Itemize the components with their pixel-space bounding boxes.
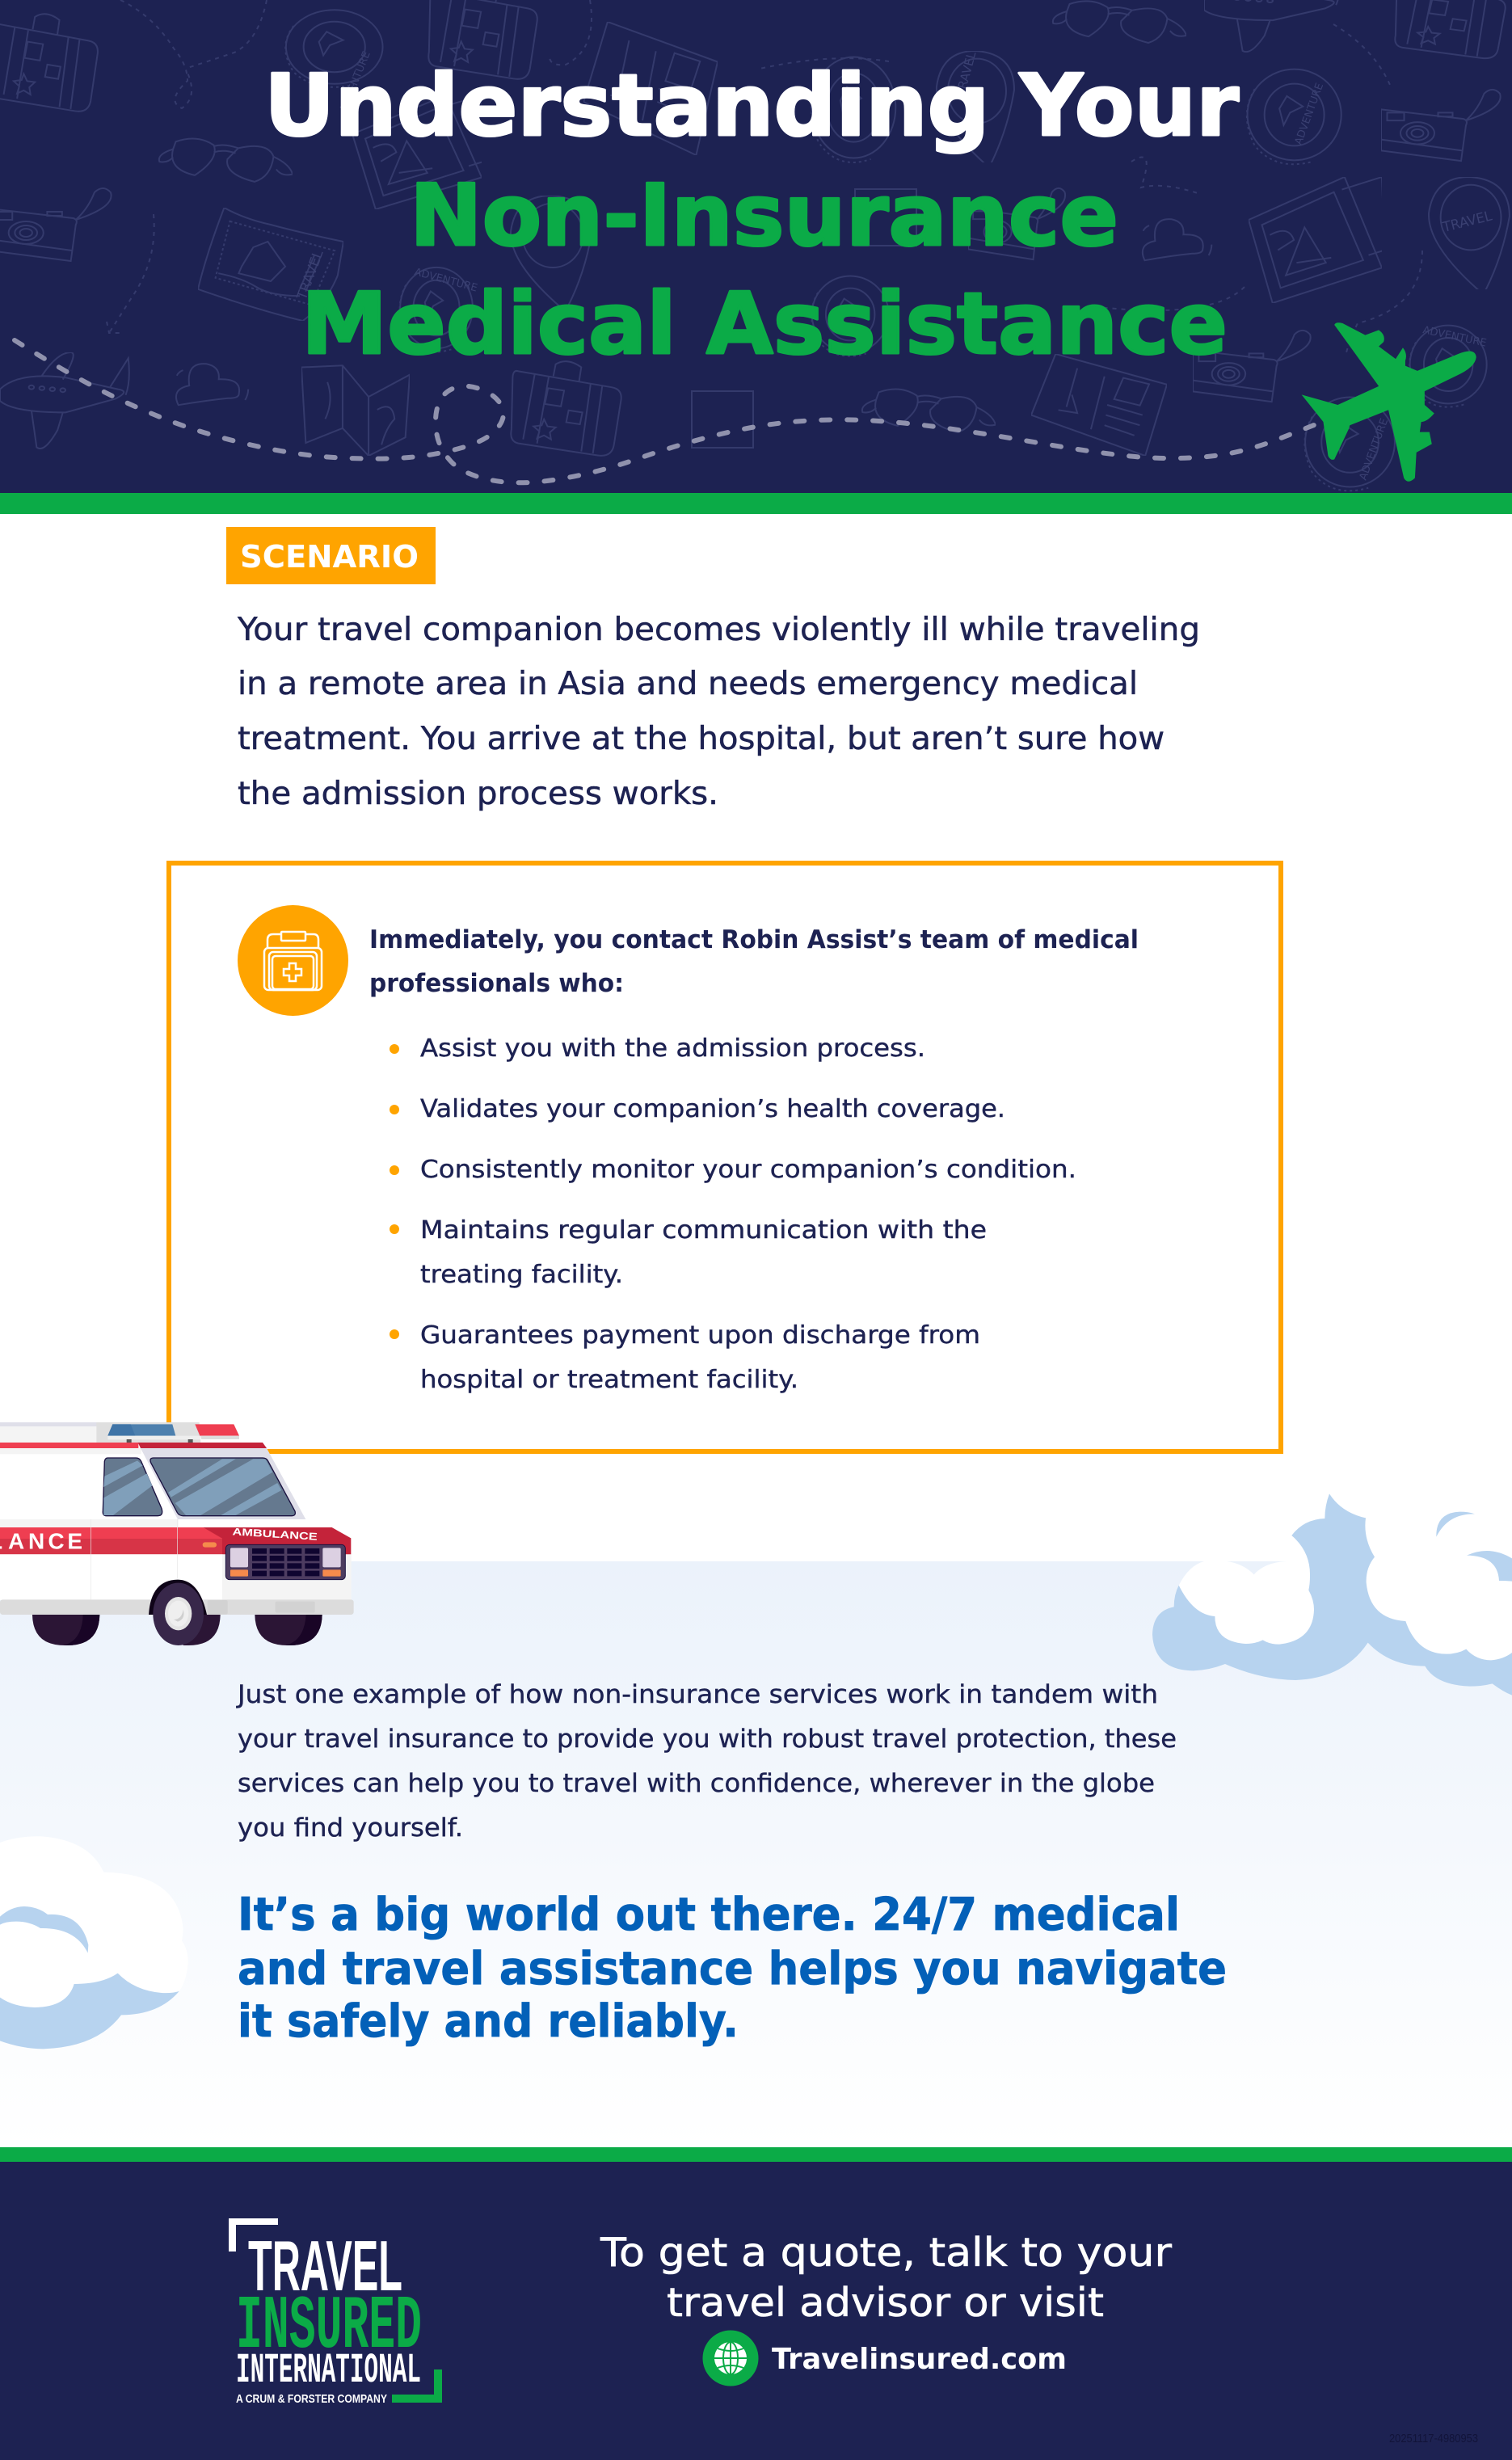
icon: green airplane — [1302, 322, 1476, 482]
closing paragraph: Just one example of how non-insurance services work in tandem with — [236, 1680, 1158, 1709]
logo: Travel Insured International: TRAVEL — [248, 2226, 402, 2306]
logo: Travel Insured International: INTERNATIONAL — [236, 2347, 421, 2395]
doodle travel pattern: ADVENTURE — [1421, 324, 1488, 350]
title: Understanding Your — [264, 57, 1239, 155]
scenario paragraph: treatment. You arrive at the hospital, but aren’t sure how — [238, 721, 1165, 757]
call to action: To get a quote, talk to your — [600, 2230, 1173, 2276]
blue call-out heading: and travel assistance helps you navigate — [238, 1943, 1227, 1995]
bullet list: hospital or treatment facility. — [420, 1366, 798, 1394]
intro sentence: Immediately, you contact Robin Assist’s team of medical — [369, 925, 1139, 954]
panel: sky background — [0, 1561, 1512, 2147]
doodle travel pattern: TRAVEL — [953, 49, 979, 99]
blue call-out heading — [238, 1889, 1227, 2048]
document code: 20251117-4980953 — [1389, 2433, 1478, 2445]
closing paragraph: you find yourself. — [238, 1813, 463, 1843]
scenario paragraph: in a remote area in Asia and needs emergency medical — [238, 666, 1138, 702]
icon: globe — [703, 2331, 758, 2386]
closing paragraph: your travel insurance to provide you with robust travel protection, these — [238, 1725, 1177, 1754]
doodle travel pattern: ADVENTURE — [413, 266, 478, 295]
panel: medical assistance box — [169, 863, 1281, 1451]
title: Medical Assistance — [301, 275, 1228, 373]
logo: Travel Insured International: A CRUM & FORSTER COMPANY — [236, 2393, 387, 2406]
ambulance hood lettering: AMBULANCE — [232, 1526, 318, 1543]
bullet list: Maintains regular communication with the — [420, 1216, 987, 1245]
bullet list: Guarantees payment upon discharge from — [420, 1321, 980, 1350]
blue call-out heading: It’s a big world out there. 24/7 medical — [238, 1889, 1180, 1941]
icon: first aid kit — [238, 905, 348, 1016]
scenario paragraph: the admission process works. — [238, 776, 718, 812]
header panel — [0, 0, 1512, 494]
bullet list: Validates your companion’s health coverage. — [420, 1095, 1005, 1123]
title: Non-Insurance — [410, 166, 1118, 265]
closing paragraph: services can help you to travel with confidence, wherever in the globe — [238, 1769, 1155, 1798]
intro sentence — [369, 925, 1139, 998]
call to action: travel advisor or visit — [667, 2280, 1104, 2326]
doodle travel pattern: ADVENTURE — [1358, 417, 1391, 482]
doodle travel pattern: ADVENTURE — [1293, 82, 1326, 146]
icon: right cloud — [1152, 1471, 1512, 1695]
bullet list — [390, 1034, 1076, 1394]
bullet list: treating facility. — [420, 1261, 623, 1289]
scenario paragraph: Your travel companion becomes violently ill while traveling — [237, 612, 1200, 648]
intro sentence: professionals who: — [369, 969, 624, 998]
website link: Travelinsured.com — [772, 2343, 1067, 2376]
panel: footer — [0, 2162, 1512, 2460]
icon: left cloud — [0, 1836, 188, 2049]
bullet list: Consistently monitor your companion’s condition. — [420, 1156, 1076, 1184]
title — [264, 57, 1239, 373]
logo: Travel Insured International — [229, 2218, 442, 2406]
scenario label — [226, 527, 436, 584]
header green divider — [0, 493, 1512, 514]
bullet list: Assist you with the admission process. — [420, 1034, 925, 1063]
footer green divider — [0, 2147, 1512, 2162]
call to action — [600, 2230, 1173, 2326]
doodle travel pattern: TRAVEL — [1440, 208, 1494, 236]
blue call-out heading: it safely and reliably. — [238, 1995, 739, 2048]
scenario label: SCENARIO — [240, 539, 419, 575]
closing paragraph — [236, 1680, 1177, 1843]
doodle travel pattern — [0, 0, 1510, 491]
doodle travel pattern: TRAVEL — [294, 247, 327, 303]
logo: Travel Insured International: INSURED — [236, 2285, 422, 2370]
scenario paragraph — [237, 612, 1200, 812]
doodle travel pattern: ADVENTURE — [338, 50, 373, 114]
dashed flight path — [15, 340, 1314, 482]
ambulance — [0, 1422, 354, 1645]
